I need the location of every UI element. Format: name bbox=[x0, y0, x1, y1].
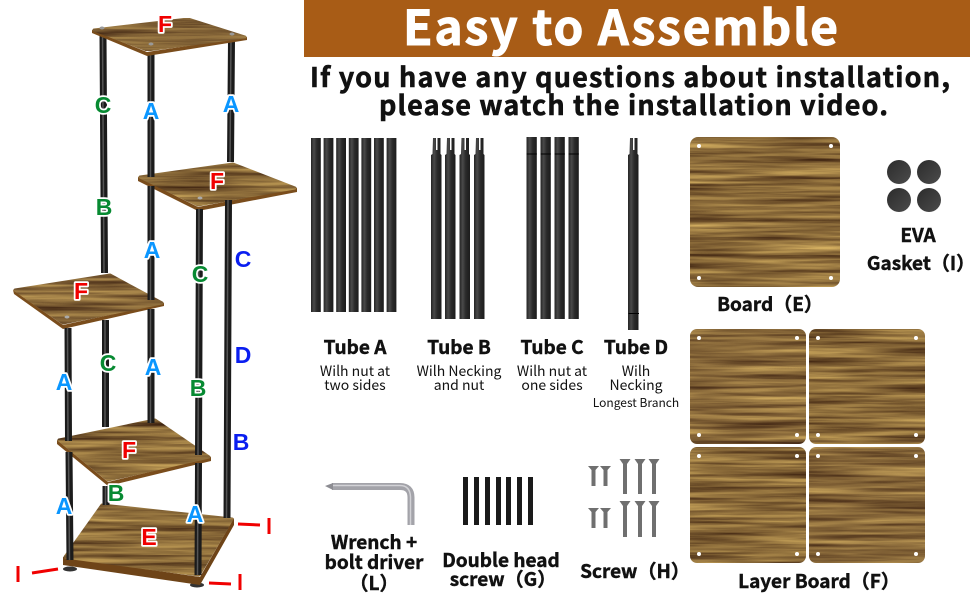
shelf poles bbox=[68, 36, 232, 575]
part letter tags: B bbox=[108, 480, 124, 506]
shelf board F top bbox=[92, 19, 247, 56]
wrench label: bolt driver bbox=[325, 548, 424, 575]
tube labels: Wilh Necking bbox=[417, 361, 501, 381]
screws H bbox=[588, 459, 660, 537]
part letter tags: F bbox=[210, 168, 224, 194]
part letter tags: A bbox=[143, 98, 159, 124]
part letter tags: B bbox=[190, 375, 206, 401]
part letter tags: B bbox=[233, 429, 249, 455]
instruction text bbox=[310, 56, 950, 123]
part letter tags: B bbox=[96, 194, 112, 220]
double head screw label: screw（G） bbox=[450, 565, 556, 592]
tube A set bbox=[311, 138, 396, 312]
tube labels: Wilh nut at bbox=[320, 361, 391, 381]
layer boards F bbox=[690, 329, 925, 563]
instruction text: please watch the installation video. bbox=[379, 84, 888, 123]
shelf board F level 3 bbox=[13, 275, 164, 329]
EVA gasket label: EVA bbox=[900, 221, 936, 248]
tube labels: two sides bbox=[324, 375, 386, 395]
assembled shelf illustration bbox=[13, 11, 297, 590]
tube labels: and nut bbox=[434, 375, 485, 395]
tube D bbox=[628, 138, 639, 330]
tube labels: Longest Branch bbox=[593, 394, 679, 411]
part letter tags: C bbox=[100, 350, 116, 376]
wrench label: （L） bbox=[350, 569, 398, 596]
part letter tags: F bbox=[158, 11, 172, 37]
part letter tags: C bbox=[95, 92, 111, 118]
tube labels: Wilh bbox=[622, 361, 650, 381]
layer board label: Layer Board（F） bbox=[738, 567, 900, 594]
part letter tags: A bbox=[145, 354, 161, 380]
part letter tags bbox=[56, 11, 251, 550]
board E panel bbox=[690, 137, 840, 287]
tube labels: Wilh nut at bbox=[517, 361, 588, 381]
part letter tags: A bbox=[56, 369, 72, 395]
part letter tags: D bbox=[235, 342, 251, 368]
double head screws G bbox=[463, 477, 533, 525]
tube C set bbox=[526, 137, 579, 319]
shelf base board E bbox=[63, 505, 234, 588]
header banner bbox=[304, 0, 970, 59]
tube labels: one sides bbox=[521, 375, 583, 395]
part letter tags: E bbox=[141, 524, 157, 550]
double head screw label: Double head bbox=[442, 546, 560, 573]
part letter tags: A bbox=[187, 501, 203, 527]
wrench label: Wrench + bbox=[331, 528, 417, 555]
part letter tags: A bbox=[144, 237, 160, 263]
tube labels: Tube A bbox=[324, 333, 387, 360]
EVA gasket label bbox=[867, 221, 970, 276]
part letter tags: C bbox=[192, 261, 208, 287]
screw label: Screw（H） bbox=[580, 557, 690, 584]
part letter tags: F bbox=[122, 437, 136, 463]
instruction text: If you have any questions about installation, bbox=[310, 56, 950, 95]
shelf board F level 4 bbox=[57, 420, 211, 486]
wrench label bbox=[325, 528, 424, 596]
part letter tags: F bbox=[74, 278, 88, 304]
part letter tags: C bbox=[235, 246, 251, 272]
part letter tags: A bbox=[56, 493, 72, 519]
tube labels: Tube B bbox=[427, 333, 491, 360]
tube labels: Necking bbox=[609, 375, 663, 395]
shelf board F level 2 bbox=[138, 164, 297, 211]
EVA gasket pads bbox=[887, 160, 941, 212]
double head screw label bbox=[442, 546, 560, 592]
tube labels: Tube D bbox=[604, 333, 668, 360]
gasket pointers I bbox=[18, 518, 269, 590]
tube labels bbox=[320, 333, 679, 411]
wrench and bolt driver bbox=[325, 483, 411, 525]
part letter tags: A bbox=[223, 91, 239, 117]
tube B set bbox=[431, 138, 484, 319]
board E label: Board（E） bbox=[717, 290, 823, 317]
tube labels: Tube C bbox=[520, 333, 584, 360]
